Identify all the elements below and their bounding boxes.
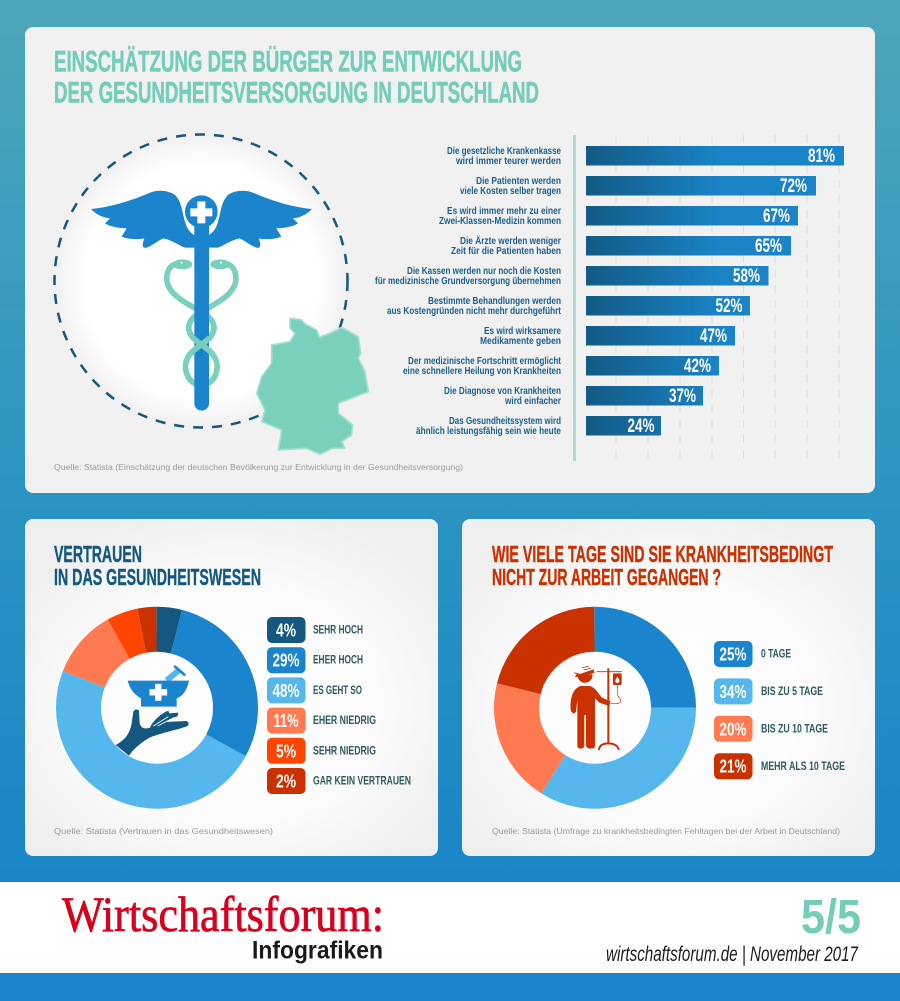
bar row: 81%: Die gesetzliche Krankenkasse (447, 145, 561, 157)
bar row: 67%: Es wird immer mehr zu einer (447, 205, 561, 217)
bar row: 47%: Es wird wirksamere (484, 325, 561, 337)
heading: sick days (492, 541, 833, 590)
legend item: 0 tage (714, 641, 791, 667)
source note: sick days: Quelle: Statista (Umfrage zu krankheitsbedingten Fehltagen bei der Arbeit in Deutschland) (492, 827, 840, 836)
bar row: 72%: viele Kosten selber tragen (460, 185, 561, 197)
bar row: 52%: 52% (716, 296, 743, 317)
heading: assessment title (54, 46, 539, 110)
bar row: 42% (403, 355, 719, 377)
bar row: 65%: Die Ärzte werden weniger (460, 234, 561, 247)
legend item: bis zu 5 tage: 34% (720, 682, 746, 702)
legend item: eher hoch: 29% (272, 651, 300, 671)
legend item: es geht so (267, 677, 362, 703)
legend item: gar kein vertrauen (267, 768, 411, 794)
bar row: 67%: 67% (763, 206, 790, 227)
bar row: 24%: ähnlich leistungsfähig sein wie heute (416, 425, 561, 437)
snake crossing over staff (188, 337, 214, 357)
bar row: 81% (447, 145, 844, 167)
bar row: 42%: 42% (684, 356, 711, 377)
bar row: 65%: Zeit für die Patienten haben (451, 245, 561, 257)
issue number: 5/5 (801, 891, 861, 944)
bar row: 65% (451, 234, 791, 257)
heading: trust: IN DAS GESUNDHEITSWESEN (54, 564, 261, 590)
bar row: 24%: 24% (628, 416, 655, 437)
logo subtitle: Infografiken (252, 936, 383, 964)
icon: white cross (191, 202, 212, 223)
legend item: bis zu 10 tage: BIS ZU 10 TAGE (761, 724, 828, 736)
heading: trust: VERTRAUEN (54, 541, 142, 567)
bar row: 47%: Medikamente geben (480, 335, 561, 347)
bar row: 58%: Die Kassen werden nur noch die Kosten (407, 265, 561, 277)
bar row: 65%: 65% (755, 236, 782, 257)
legend item: es geht so: 48% (272, 681, 300, 701)
legend item: sehr hoch: SEHR HOCH (313, 624, 363, 636)
heading: trust (54, 541, 261, 590)
bar row: 67%: Zwei-Klassen-Medizin kommen (439, 215, 561, 227)
panel: citizens' assessment (25, 27, 875, 493)
bar chart: expectations (375, 135, 844, 461)
legend item: sehr niedrig (267, 738, 376, 764)
legend item: sehr niedrig: SEHR NIEDRIG (313, 745, 376, 757)
illustration: caduceus in dashed circle (54, 134, 368, 454)
icon: map of Germany (257, 318, 368, 454)
bar row: 58%: für medizinische Grundversorgung übernehmen (375, 275, 561, 287)
legend item: sehr hoch: 4% (276, 620, 296, 640)
icon: snakes behind staff (167, 259, 236, 384)
panel: sick days (462, 519, 875, 856)
bar row: 52%: Bestimmte Behandlungen werden (428, 295, 561, 307)
bar row: 81%: 81% (808, 146, 835, 167)
bar row: 72%: 72% (780, 176, 807, 197)
legend item: mehr als 10 tage: 21% (720, 757, 746, 777)
source note: trust: Quelle: Statista (Vertrauen in das Gesundheitswesen) (54, 827, 273, 836)
legend item: eher niedrig: EHER NIEDRIG (313, 715, 376, 727)
bar row: 67% (439, 205, 798, 227)
icon: patient with IV drip (571, 666, 622, 749)
bar row: 72%: Die Patienten werden (476, 175, 561, 187)
logo: Wirtschaftsforum: Wirtschaftsforum: (62, 886, 384, 942)
bar row: 58% (375, 265, 768, 287)
bar row: 37%: 37% (669, 386, 696, 407)
bar row: 52%: aus Kostengründen nicht mehr durchgeführt (387, 305, 561, 317)
donut chart: trust (78, 629, 236, 786)
heading: assessment title: DER GESUNDHEITSVERSORGUNG IN DEUTSCHLAND (54, 76, 539, 110)
footer band (0, 882, 900, 1001)
legend item: 0 tage: 25% (720, 644, 746, 664)
legend item: sehr hoch (267, 617, 363, 643)
bar row: 37%: Die Diagnose von Krankheiten (444, 385, 561, 397)
legend item: mehr als 10 tage (714, 753, 845, 779)
legend: sick days (714, 641, 845, 779)
bar row: 58%: 58% (733, 266, 760, 287)
legend item: eher hoch: EHER HOCH (313, 655, 363, 667)
bar row: 42%: eine schnellere Heilung von Krankheiten (403, 365, 561, 377)
legend item: eher hoch (267, 647, 363, 673)
legend item: 0 tage: 0 TAGE (761, 649, 791, 661)
bar row: 37% (444, 385, 703, 407)
heading: assessment title: EINSCHÄTZUNG DER BÜRGER ZUR ENTWICKLUNG (54, 46, 522, 78)
legend item: gar kein vertrauen: GAR KEIN VERTRAUEN (313, 776, 411, 788)
donut chart: sick days (516, 629, 674, 786)
source note: assessment: Quelle: Statista (Einschätzung der deutschen Bevölkerung zur Entwicklung in der Gesundheitsversorgung) (54, 463, 463, 472)
bar row: 42%: Der medizinische Fortschritt ermöglicht (408, 355, 561, 367)
legend item: bis zu 10 tage (714, 716, 828, 742)
legend item: eher niedrig: 11% (274, 711, 298, 731)
bar row: 72% (460, 175, 816, 197)
bar row: 24% (416, 415, 661, 437)
panel: trust in healthcare (25, 519, 438, 856)
legend item: gar kein vertrauen: 2% (276, 772, 296, 792)
legend item: bis zu 5 tage: BIS ZU 5 TAGE (761, 686, 823, 698)
bar row: 37%: wird einfacher (504, 395, 561, 407)
legend item: bis zu 10 tage: 20% (720, 719, 746, 739)
heading: sick days: NICHT ZUR ARBEIT GEGANGEN ? (492, 564, 721, 590)
legend item: sehr niedrig: 5% (276, 741, 296, 761)
legend item: bis zu 5 tage (714, 678, 823, 704)
legend item: es geht so: ES GEHT SO (313, 685, 362, 697)
bar row: 24%: Das Gesundheitssystem wird (449, 415, 561, 427)
icon: staff with wings (91, 191, 312, 411)
icon: mortar over hand (116, 667, 189, 756)
bar row: 52% (387, 295, 750, 317)
bar row: 47%: 47% (700, 326, 727, 347)
bar row: 81%: wird immer teurer werden (455, 155, 561, 167)
legend item: mehr als 10 tage: MEHR ALS 10 TAGE (761, 761, 845, 773)
legend item: eher niedrig (267, 708, 376, 734)
bar row: 47% (480, 325, 735, 347)
legend: trust (267, 617, 411, 794)
